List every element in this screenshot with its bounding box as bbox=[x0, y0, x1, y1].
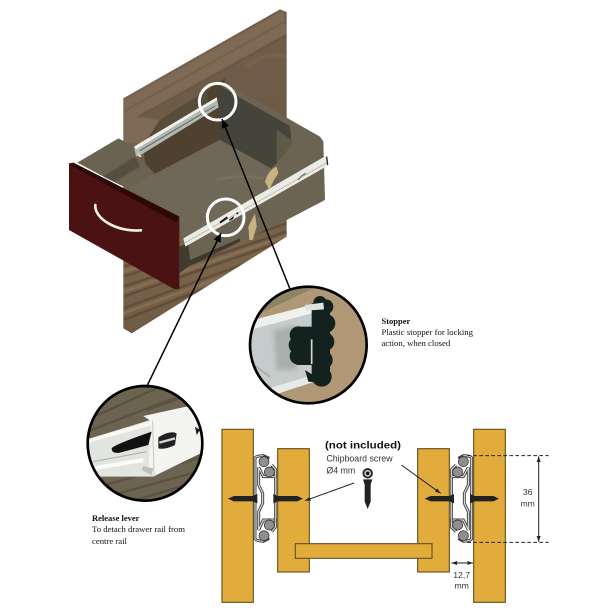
drawer left side wall bbox=[77, 138, 153, 189]
under-drawer shadow bbox=[179, 238, 240, 273]
black plastic stopper bbox=[289, 296, 335, 387]
screw label: Ø4 mm bbox=[326, 466, 355, 476]
top edge of back wall bbox=[219, 85, 293, 126]
stopper circle outline bbox=[250, 287, 367, 403]
far rail bbox=[134, 97, 219, 157]
release lever description: To detach drawer rail from bbox=[92, 524, 185, 534]
dimension arrow: 12,7 mm bbox=[451, 561, 473, 564]
stopper description: Plastic stopper for locking bbox=[382, 327, 474, 337]
stopper description: action, when closed bbox=[382, 338, 451, 348]
stopper background bbox=[258, 288, 366, 402]
mounting screws bbox=[228, 494, 499, 503]
callout: stopper detail bbox=[247, 283, 370, 407]
arrow: screw to left bbox=[305, 483, 354, 501]
lever slot bbox=[112, 432, 152, 453]
arrow: screw to right bbox=[401, 465, 441, 493]
back wall bbox=[219, 85, 292, 168]
white circle: stopper location bbox=[199, 83, 236, 120]
stopper heading: Stopper bbox=[382, 316, 411, 326]
arrow to stopper bbox=[222, 119, 290, 289]
shadow on left wall bbox=[103, 157, 140, 182]
white circle: lever location bbox=[207, 199, 244, 236]
rear corner of drawer bbox=[237, 89, 323, 168]
tan wood blocks bbox=[248, 167, 278, 240]
lever circle outline bbox=[88, 386, 202, 501]
left rail profile bbox=[255, 456, 275, 541]
near rail bbox=[183, 155, 328, 247]
drawer floor bbox=[128, 140, 271, 241]
rail bbox=[251, 313, 312, 394]
wood boards bbox=[222, 429, 505, 602]
dimension lines bbox=[467, 456, 549, 542]
cut-out opening in panel bbox=[143, 78, 225, 174]
cross-section diagram bbox=[222, 429, 549, 602]
slider sleeve bbox=[143, 404, 204, 475]
drawer front panel bbox=[69, 163, 179, 289]
dimension text: 12,7 mm: mm bbox=[454, 581, 469, 591]
callout: release lever detail bbox=[85, 383, 205, 503]
text: stopper bbox=[382, 316, 474, 348]
drawer near side wall bbox=[184, 140, 325, 265]
icon: chipboard screw bbox=[363, 469, 372, 509]
right rail profile bbox=[452, 456, 472, 541]
heading: not included: (not included) bbox=[325, 440, 401, 451]
dimension text: 36 mm: 36 bbox=[523, 487, 533, 497]
wood panel bbox=[123, 9, 287, 333]
lever background bbox=[89, 387, 200, 500]
rail body bbox=[89, 420, 200, 477]
dimension text: 36 mm: mm bbox=[520, 498, 535, 508]
arrow to release lever bbox=[147, 233, 221, 386]
floor highlight bbox=[217, 176, 263, 180]
text: release lever bbox=[92, 513, 185, 546]
dimension text: 12,7 mm: 12,7 bbox=[453, 570, 470, 580]
release lever heading: Release lever bbox=[92, 513, 140, 523]
screw label: Chipboard screw bbox=[326, 454, 393, 464]
illustration: drawer on wood panel bbox=[69, 9, 328, 333]
dimension arrow: 36 mm bbox=[537, 456, 540, 542]
release lever description: centre rail bbox=[92, 536, 128, 546]
drawer handle bbox=[95, 205, 141, 231]
